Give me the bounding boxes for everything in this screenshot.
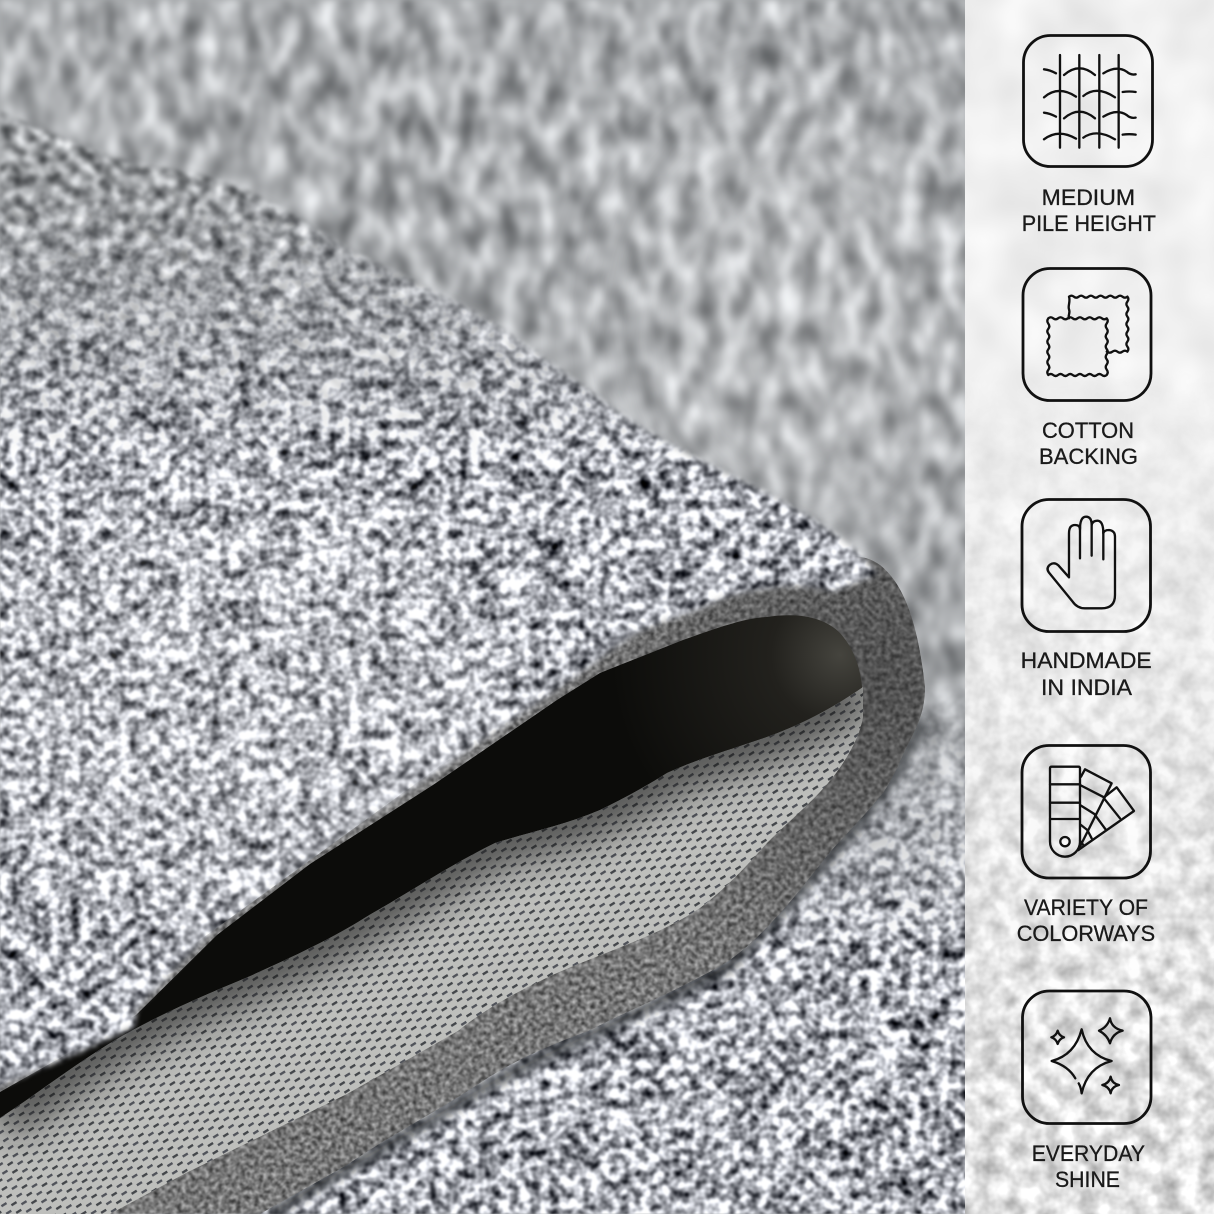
label: handmade in India: HANDMADE [1021, 648, 1152, 673]
rolled rug top surface [0, 110, 878, 1088]
dark cavity inside the fold [0, 615, 863, 1140]
cotton backing [0, 687, 863, 1214]
label: medium pile height: MEDIUM [1042, 185, 1135, 210]
label: everyday shine: SHINE [1055, 1167, 1120, 1192]
feature: medium pile height [1022, 36, 1156, 236]
label: cotton backing: COTTON [1042, 418, 1134, 443]
rug surface, out of focus background [0, 0, 970, 1214]
feature: cotton backing [1023, 268, 1151, 469]
label: cotton backing: BACKING [1039, 444, 1138, 469]
icon: colour swatch fan [1050, 767, 1134, 857]
icon: open hand [1048, 517, 1115, 608]
feature: variety of colorways [1017, 746, 1155, 946]
feature: everyday shine [1022, 991, 1151, 1192]
feature: handmade in India [1021, 500, 1152, 700]
icon: sparkles [1051, 1018, 1123, 1093]
icon: pile fibres [1044, 55, 1136, 148]
label: medium pile height: PILE HEIGHT [1022, 211, 1156, 236]
photo: rolled rug close-up [0, 0, 970, 1214]
label: variety of colorways: COLORWAYS [1017, 921, 1155, 946]
shadow under the rolled edge [270, 720, 920, 1214]
panel: feature column [965, 0, 1214, 1214]
label: variety of colorways: VARIETY OF [1024, 895, 1148, 920]
label: handmade in India: IN INDIA [1041, 675, 1132, 700]
grey pile rim of the fold [0, 556, 925, 1214]
icon: fabric swatches [1047, 296, 1128, 376]
rug surface, in focus foreground [0, 695, 965, 1214]
label: everyday shine: EVERYDAY [1032, 1141, 1145, 1166]
